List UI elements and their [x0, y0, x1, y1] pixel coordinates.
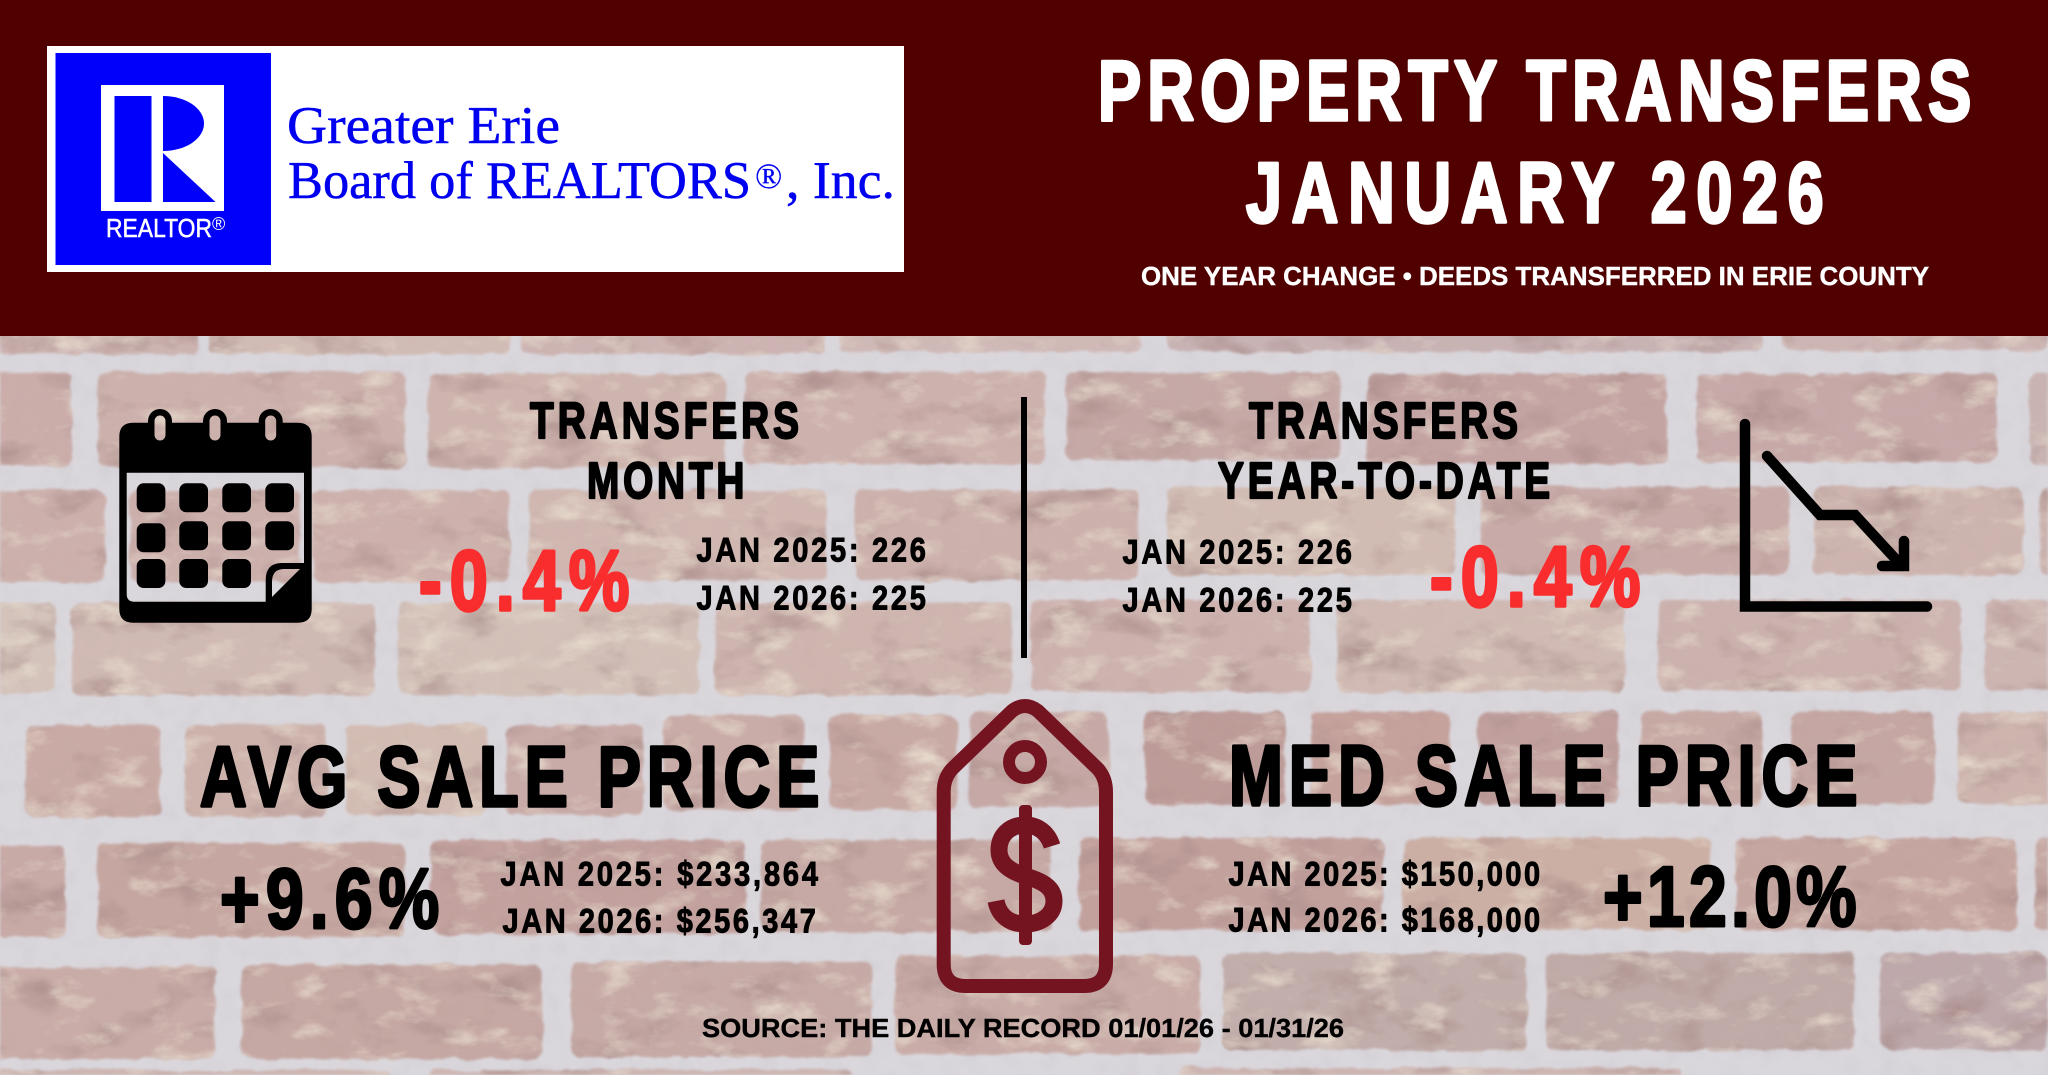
heading: transfers year-to-date	[1218, 392, 1550, 509]
divider	[1021, 397, 1027, 658]
comparison: avg price values: JAN 2026: $256,347	[502, 901, 816, 940]
title	[1098, 43, 1971, 240]
stat: month change: -0.4%	[419, 534, 629, 629]
icon: REALTOR R block	[56, 53, 271, 265]
title: PROPERTY TRANSFERS	[1098, 43, 1971, 138]
panel: average sale price	[200, 729, 819, 947]
source note: SOURCE: THE DAILY RECORD 01/01/26 - 01/31/26	[702, 1013, 1344, 1043]
comparison: month values	[696, 530, 926, 617]
comparison: avg price values: JAN 2025: $233,864	[500, 854, 818, 893]
comparison: month values: JAN 2025: 226	[696, 530, 926, 569]
comparison: median price values: JAN 2026: $168,000	[1228, 900, 1540, 939]
heading: avg sale price: AVG SALE PRICE	[200, 729, 819, 824]
heading: med sale price: MED SALE PRICE	[1229, 728, 1858, 823]
subtitle: ONE YEAR CHANGE • DEEDS TRANSFERRED IN ERIE COUNTY	[1141, 261, 1929, 291]
stat: avg price change: +9.6%	[220, 852, 439, 947]
panel: transfers month	[119, 392, 926, 629]
comparison: month values: JAN 2026: 225	[696, 578, 926, 617]
heading: transfers year-to-date: TRANSFERS	[1249, 392, 1518, 449]
logo text line 2: , Inc.	[786, 152, 895, 210]
stat: year-to-date change: -0.4%	[1430, 530, 1640, 625]
heading: transfers month: MONTH	[587, 452, 744, 509]
comparison: year-to-date values	[1122, 532, 1352, 619]
heading: transfers month: TRANSFERS	[530, 392, 799, 449]
header band	[0, 0, 2048, 336]
logo text line 2: Board of REALTORS	[288, 152, 751, 210]
comparison: median price values: JAN 2025: $150,000	[1228, 854, 1540, 893]
stat: median price change: +12.0%	[1603, 850, 1857, 945]
comparison: year-to-date values: JAN 2026: 225	[1122, 580, 1352, 619]
icon: calendar	[119, 409, 312, 623]
icon: declining line chart	[1745, 424, 1927, 606]
background: brick wall	[0, 328, 2048, 1075]
icon: price tag with dollar sign	[944, 706, 1106, 986]
logo text line 1: Greater Erie	[287, 97, 560, 155]
logo panel: Greater Erie Board of REALTORS	[47, 46, 904, 272]
comparison: median price values	[1228, 854, 1540, 939]
heading: transfers month	[530, 392, 799, 509]
panel: transfers year-to-date	[1122, 392, 1927, 625]
title: JANUARY 2026	[1246, 145, 1824, 240]
comparison: avg price values	[500, 854, 818, 940]
comparison: year-to-date values: JAN 2025: 226	[1122, 532, 1352, 571]
heading: transfers year-to-date: YEAR-TO-DATE	[1218, 452, 1550, 509]
icon: REALTOR R block: REALTOR	[106, 213, 212, 243]
panel: median sale price	[1228, 728, 1858, 945]
logo text line 2: ®	[755, 156, 782, 196]
icon: REALTOR R block: ®	[212, 214, 225, 234]
